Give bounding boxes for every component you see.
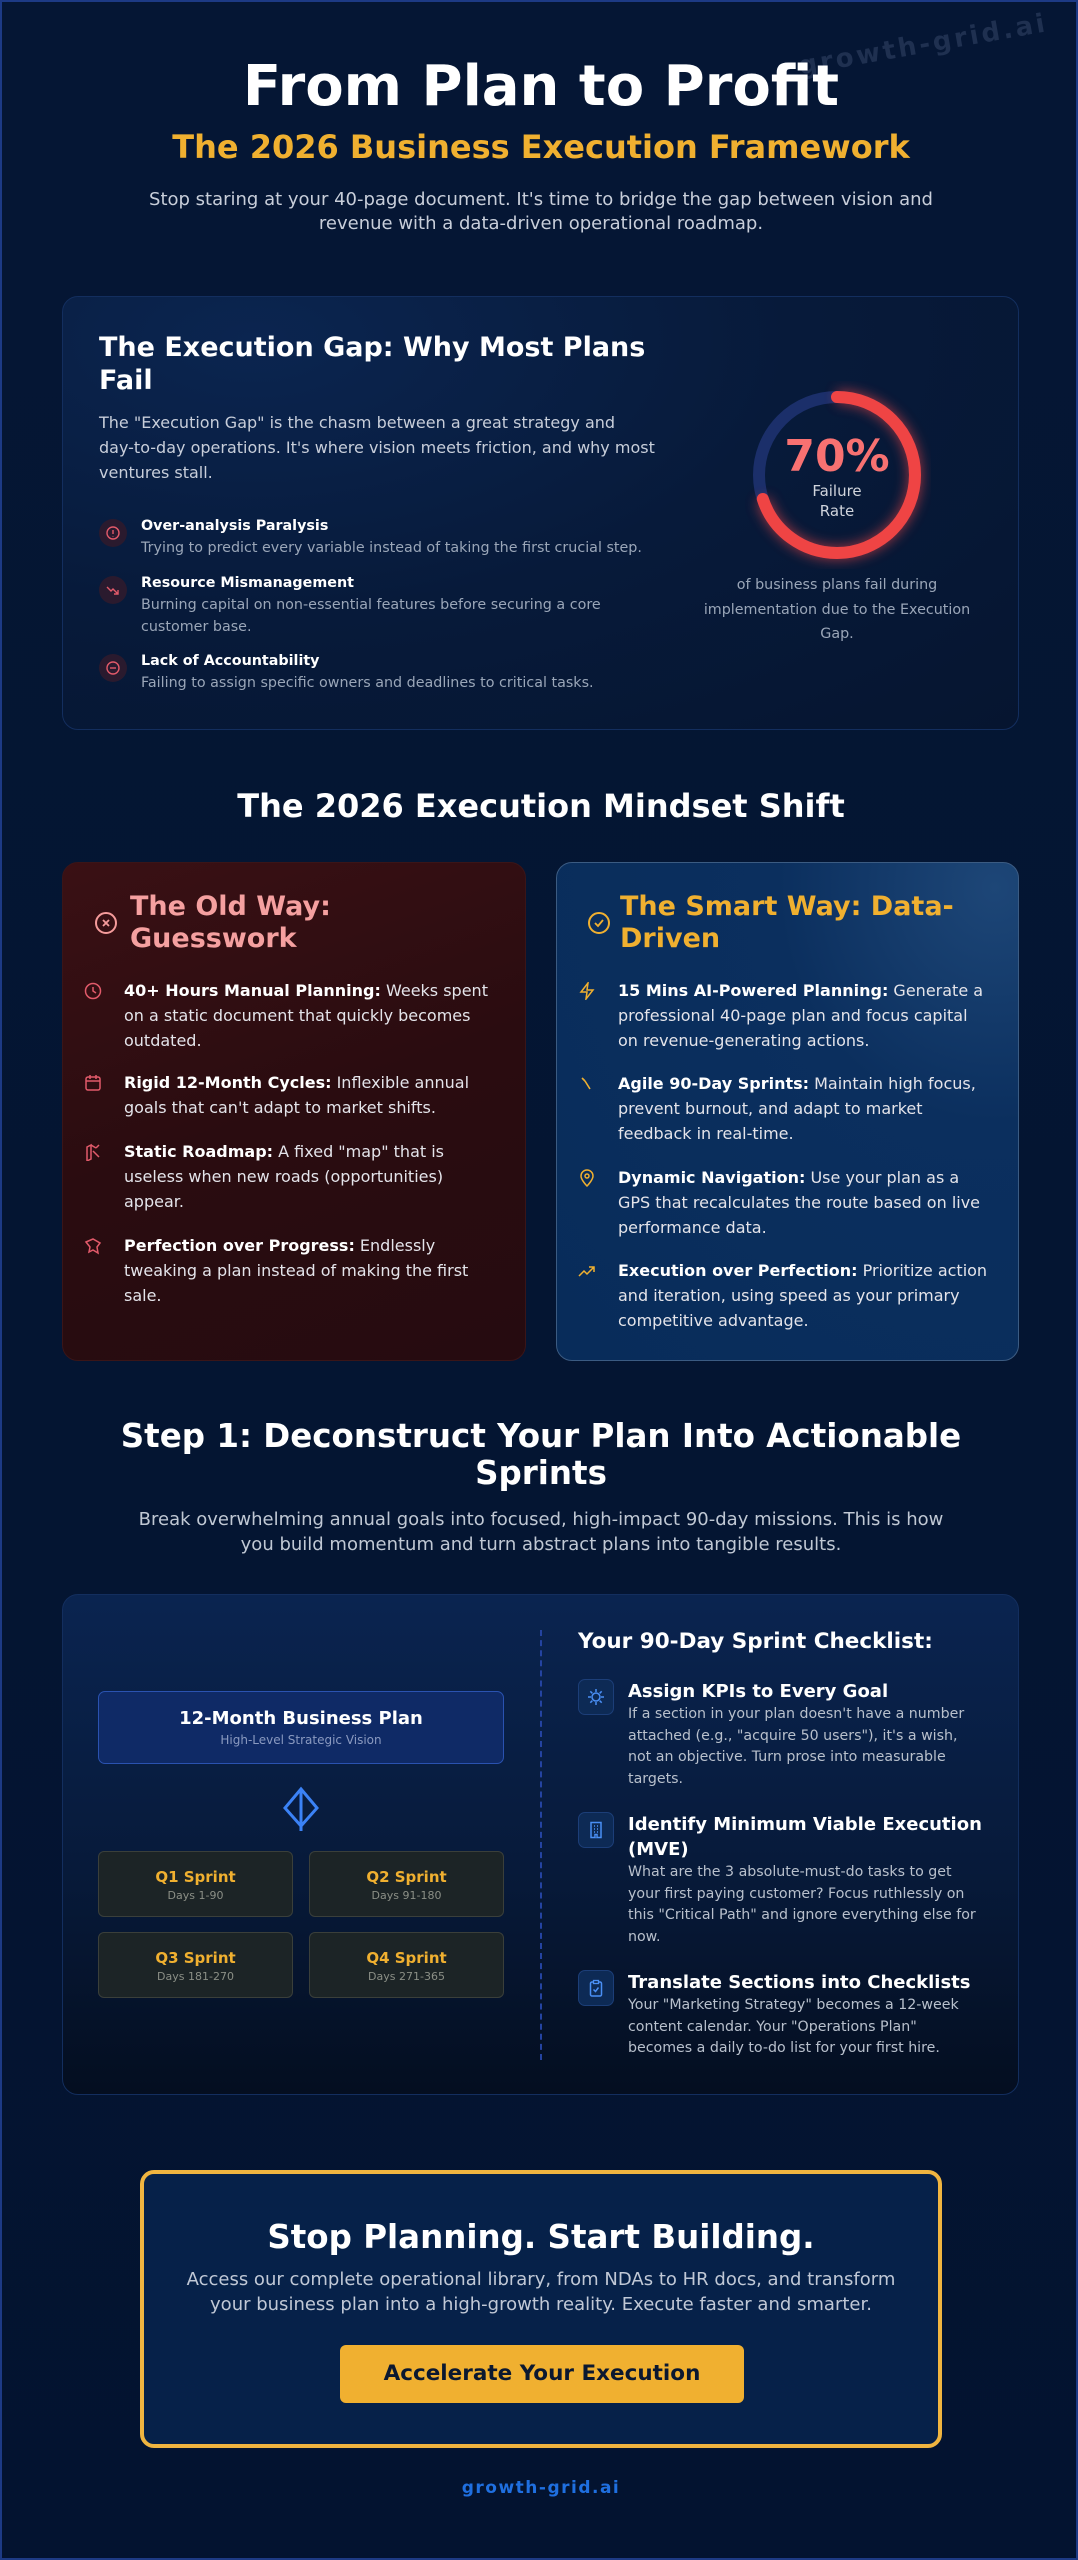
item: dynamic navigation: Dynamic Navigation: Use your plan as a [618, 1168, 959, 1187]
box: Q3: Q3 Sprint [155, 1949, 236, 1967]
icon: clipboard [578, 1970, 614, 2006]
item: assign KPIs [628, 1681, 964, 1787]
text: CTA: your business plan into a high-growth reality. Execute faster and smarter. [210, 2294, 872, 2315]
box: Q4 [309, 1932, 504, 1998]
caption: failure rate: implementation due to the Execution [704, 602, 970, 618]
item: accountability: Lack of Accountability [141, 653, 320, 669]
caption: failure rate: of business plans fail during [737, 577, 937, 593]
box: Q1 [98, 1851, 293, 1917]
heading: old way: Guesswork [130, 923, 297, 954]
intro text [149, 189, 933, 234]
item: resource mismanagement [99, 575, 601, 635]
text: step 1 description: Break overwhelming annual goals into focused, high-impact 90-day missions. This is how [139, 1509, 943, 1530]
item: AI planning: professional 40-page plan and focus capital [618, 1006, 968, 1025]
text: step 1 description [139, 1509, 943, 1555]
heading: smart way: Driven [620, 923, 720, 954]
item: static roadmap: useless when new roads (opportunities) [124, 1167, 443, 1186]
item: MVE [628, 1814, 982, 1945]
chart: 70% failure ring: Rate [820, 502, 854, 520]
item: static roadmap [86, 1142, 444, 1211]
heading: execution gap [99, 332, 645, 396]
item: rigid cycles [85, 1073, 469, 1117]
item: execution over perfection: and iteration, using speed as your primary [618, 1286, 960, 1305]
item: AI planning: on revenue-generating actions. [618, 1031, 869, 1050]
heading: step 1: Step 1: Deconstruct Your Plan Into Actionable [121, 1417, 961, 1455]
icon: gear [578, 1679, 614, 1715]
heading: old way: The Old Way: [130, 891, 331, 922]
icon: minus circle [99, 654, 127, 682]
box: Q1: Days 1-90 [168, 1889, 223, 1902]
item: assign KPIs: not an objective. Turn prose into measurable [628, 1749, 946, 1765]
heading: smart way [620, 891, 954, 954]
subtitle: The 2026 Business Execution Framework [172, 128, 910, 166]
box: 12-month plan: High-Level Strategic Vision [220, 1733, 382, 1747]
item: execution over perfection: Execution over Perfection: Prioritize action [618, 1261, 987, 1280]
footer: brand: growth-grid.ai [462, 2478, 620, 2498]
item: assign KPIs: Assign KPIs to Every Goal [628, 1681, 888, 1702]
box: Q3: Days 181-270 [157, 1970, 234, 1983]
button: accelerate: Accelerate Your Execution [384, 2361, 700, 2386]
text: execution gap description: The "Execution Gap" is the chasm between a great strategy and [99, 413, 615, 432]
item: static roadmap: appear. [124, 1192, 184, 1211]
heading: smart way: The Smart Way: Data- [620, 891, 954, 922]
panel: sprints [62, 1594, 1019, 2095]
item: dynamic navigation: performance data. [618, 1218, 767, 1237]
item: AI planning: 15 Mins AI-Powered Planning: Generate a [618, 981, 983, 1000]
item: assign KPIs: targets. [628, 1771, 683, 1787]
item: agile sprints [582, 1074, 976, 1143]
text: execution gap description: ventures stall. [99, 463, 213, 482]
item: rigid cycles: Rigid 12-Month Cycles: Inflexible annual [124, 1073, 469, 1092]
item: MVE: Identify Minimum Viable Execution [628, 1814, 982, 1835]
heading: old way [130, 891, 331, 954]
item: resource mismanagement: Resource Mismanagement [141, 575, 354, 591]
item: agile sprints: Agile 90-Day Sprints: Maintain high focus, [618, 1074, 976, 1093]
item: execution over perfection [578, 1261, 987, 1330]
item: over-analysis: Trying to predict every variable instead of taking the first crucial step. [141, 540, 642, 556]
icon: trend down [99, 576, 127, 604]
intro text: Stop staring at your 40-page document. It's time to bridge the gap between vision and [149, 189, 933, 210]
box: Q4: Days 271-365 [368, 1970, 445, 1983]
intro text: revenue with a data-driven operational roadmap. [319, 213, 763, 234]
button: accelerate [340, 2345, 744, 2403]
item: assign KPIs: attached (e.g., "acquire 50 users"), it's a wish, [628, 1728, 958, 1744]
item: translate sections: becomes a daily to-do list for your first hire. [628, 2040, 940, 2056]
item: dynamic navigation: GPS that recalculates the route based on live [618, 1193, 980, 1212]
icon: building [578, 1812, 614, 1848]
item: translate sections [628, 1972, 970, 2056]
item: AI planning [580, 981, 983, 1050]
heading: step 1: Sprints [475, 1454, 607, 1492]
item: manual planning: 40+ Hours Manual Planning: Weeks spent [124, 981, 488, 1000]
item: manual planning [84, 981, 488, 1050]
item: translate sections: content calendar. Your "Operations Plan" [628, 2019, 917, 2035]
text: execution gap description [98, 413, 655, 482]
item: manual planning: outdated. [124, 1031, 202, 1050]
icon: x circle [95, 912, 117, 934]
text: CTA: Access our complete operational library, from NDAs to HR docs, and transform [187, 2269, 895, 2290]
item: MVE: your first paying customer? Focus ruthlessly on [628, 1886, 964, 1902]
box: Q4: Q4 Sprint [366, 1949, 447, 1967]
box: Q1: Q1 Sprint [155, 1868, 236, 1886]
item: resource mismanagement: Burning capital on non-essential features before securing a core [141, 597, 601, 613]
item: accountability [99, 653, 594, 691]
chart: 70% failure ring [750, 382, 930, 568]
item: over-analysis [99, 518, 642, 556]
heading: step 1 [121, 1417, 961, 1492]
item: manual planning: on a static document that quickly becomes [124, 1006, 470, 1025]
box: Q2: Days 91-180 [372, 1889, 441, 1902]
box: 12-month plan [98, 1691, 504, 1764]
item: perfection [84, 1236, 468, 1305]
item: assign KPIs: If a section in your plan doesn't have a number [628, 1706, 964, 1722]
panel: old way [62, 862, 526, 1361]
box: Q2: Q2 Sprint [366, 1868, 447, 1886]
item: dynamic navigation [580, 1168, 980, 1237]
chart: 70% failure ring: 70% [784, 431, 890, 482]
item: rigid cycles: goals that can't adapt to market shifts. [124, 1098, 436, 1117]
item: agile sprints: feedback in real-time. [618, 1124, 794, 1143]
panel: smart way [556, 862, 1019, 1361]
item: resource mismanagement: customer base. [141, 619, 252, 635]
heading: execution gap: Fail [99, 365, 153, 396]
title: From Plan to Profit [243, 54, 839, 119]
text: step 1 description: you build momentum and turn abstract plans into tangible results. [241, 1534, 841, 1555]
item: translate sections: Your "Marketing Strategy" becomes a 12-week [628, 1997, 959, 2013]
text: CTA [186, 2269, 895, 2315]
callout: CTA [140, 2170, 942, 2448]
heading: mindset shift: The 2026 Execution Mindset Shift [237, 787, 845, 825]
heading: execution gap: The Execution Gap: Why Most Plans [99, 332, 645, 363]
item: over-analysis: Over-analysis Paralysis [141, 518, 328, 534]
item: perfection: sale. [124, 1286, 162, 1305]
icon: check circle [588, 912, 610, 934]
item: agile sprints: prevent burnout, and adapt to market [618, 1099, 923, 1118]
icon: alert [99, 519, 127, 547]
item: execution over perfection: competitive advantage. [618, 1311, 809, 1330]
item: accountability: Failing to assign specific owners and deadlines to critical tasks. [141, 675, 594, 691]
text: execution gap description: day-to-day operations. It's where vision meets friction, and why most [99, 438, 655, 457]
heading: CTA: Stop Planning. Start Building. [267, 2218, 815, 2256]
item: MVE: this "Critical Path" and ignore everything else for [628, 1907, 976, 1923]
item: perfection: tweaking a plan instead of making the first [124, 1261, 468, 1280]
heading: checklist: Your 90-Day Sprint Checklist: [578, 1629, 933, 1654]
box: 12-month plan: 12-Month Business Plan [179, 1708, 423, 1729]
icon: split arrow [283, 1786, 319, 1831]
item: MVE: now. [628, 1929, 660, 1945]
item: static roadmap: Static Roadmap: A fixed "map" that is [124, 1142, 444, 1161]
caption: failure rate [704, 577, 970, 642]
item: MVE: What are the 3 absolute-must-do tasks to get [628, 1864, 952, 1880]
watermark: growth-grid.ai [796, 8, 1050, 82]
item: perfection: Perfection over Progress: Endlessly [124, 1236, 435, 1255]
box: Q3 [98, 1932, 293, 1998]
chart: 70% failure ring: Failure [812, 482, 862, 500]
item: translate sections: Translate Sections into Checklists [628, 1972, 970, 1993]
panel: execution gap [62, 296, 1019, 730]
box: Q2 [309, 1851, 504, 1917]
diagram: plan breakdown [98, 1691, 504, 1998]
caption: failure rate: Gap. [820, 626, 854, 642]
item: MVE: (MVE) [628, 1839, 689, 1860]
